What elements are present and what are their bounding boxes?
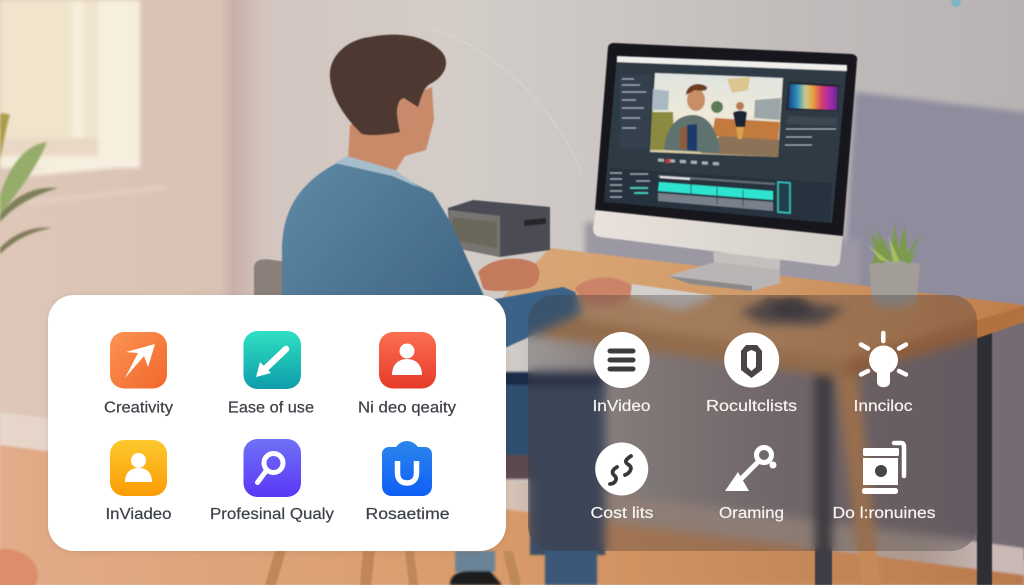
ear [397,99,409,125]
icon: menu circle [594,332,650,388]
item: Rosaetime [366,441,450,523]
label: Cost lits: Cost lits [590,505,654,522]
neck and face [348,87,434,172]
item: Cost lits [590,442,654,522]
label: Ease of use: Ease of use [228,400,314,416]
label: Profesinal Qualy: Profesinal Qualy [210,506,334,523]
inspector rows [786,116,838,126]
desk legs [815,370,832,585]
left media list [620,75,652,148]
item: Do l:ronuines [832,443,936,522]
item: Creativity [104,332,173,416]
label: Do l:ronuines: Do l:ronuines [832,505,936,522]
icon: shield circle [724,332,779,388]
teal track [658,182,773,200]
timeline [604,168,832,222]
colour palette panel [786,82,839,111]
person [282,35,634,585]
panel: translucent dark feature card [528,295,977,551]
left potted plant leaves [0,113,58,254]
label: InViadeo: InViadeo [106,506,172,523]
right potted plant [868,222,921,308]
label: Rosaetime: Rosaetime [366,506,450,523]
item: Ni deo qeaity [358,332,456,416]
icon: orange arrow [110,332,167,388]
item: Profesinal Qualy [210,439,334,523]
icon: light bulb [861,333,906,387]
torso in blue sweater [282,163,484,400]
icon: yellow person [110,440,167,496]
icon: squiggle circle [595,442,648,496]
label: Ni deo qeaity: Ni deo qeaity [358,400,456,416]
item: InVideo [592,332,650,415]
icon: document box [862,443,904,494]
monitor bezel [595,43,857,236]
monitor chin [593,208,843,266]
item: Rocultclists [706,332,797,415]
icon: teal pencil [244,331,301,389]
label: Innciloc: Innciloc [854,398,913,415]
item: Ease of use [228,331,314,416]
hands [478,258,539,291]
hair [330,35,446,135]
forearm sleeve [490,287,582,347]
printer box [448,200,550,257]
label: Creativity: Creativity [104,400,173,416]
transport controls [658,160,720,164]
gray track [658,193,773,211]
icon: blue U badge [382,441,432,496]
monitor [593,43,857,291]
item: Innciloc [854,333,913,415]
label: Rocultclists: Rocultclists [706,398,797,415]
icon: key arrow [725,448,776,491]
label: InVideo: InVideo [592,398,650,415]
monitor stand [668,252,780,291]
icon: red person [379,332,436,388]
item: InViadeo [106,440,172,523]
collar [335,156,420,188]
preview video [650,73,783,157]
window [0,0,165,206]
teal meter box [778,182,790,213]
editor screen [604,56,847,223]
chair [254,259,521,585]
desk [490,248,1024,585]
icon: purple magnifier [244,439,301,497]
label: Oraming: Oraming [719,505,784,522]
panel: light feature card [48,295,506,551]
track labels [610,173,650,197]
floor and baseboard [0,412,1024,585]
keyboard and mouse [630,284,846,325]
item: Oraming [719,448,784,522]
lower body [450,372,605,585]
